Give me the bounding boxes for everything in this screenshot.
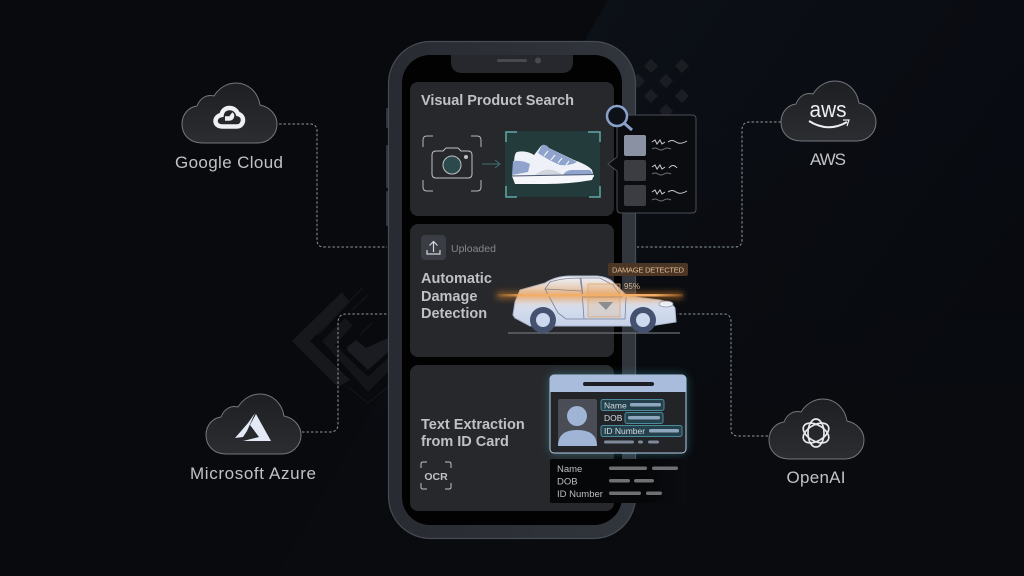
panel: visual product search xyxy=(410,82,614,216)
phone xyxy=(386,42,636,538)
wheels xyxy=(530,307,656,333)
heading: Text Extraction xyxy=(421,417,525,433)
cloud: Google Cloud xyxy=(182,83,277,143)
card footer lines xyxy=(604,440,659,444)
headlight xyxy=(659,301,673,307)
icon: Azure logo xyxy=(235,413,271,441)
icon: shoe xyxy=(512,145,594,184)
extracted text panel xyxy=(550,459,686,503)
panel: automatic damage detection xyxy=(410,224,614,357)
card glow xyxy=(550,375,686,453)
card body xyxy=(550,375,686,453)
icon: AWS logo: aws xyxy=(810,97,846,122)
label: Microsoft Azure: Microsoft Azure xyxy=(190,464,316,483)
icon: Google Cloud logo xyxy=(216,108,243,126)
cloud: OpenAI xyxy=(769,399,864,459)
cloud: AWS xyxy=(781,81,876,141)
car with damage detection xyxy=(497,263,688,333)
label: OpenAI: OpenAI xyxy=(786,468,846,487)
card header xyxy=(550,375,686,392)
damage highlight box xyxy=(588,284,620,317)
phone notch xyxy=(451,55,573,73)
label: AWS: AWS xyxy=(810,150,846,169)
arrow xyxy=(482,160,500,168)
phone screen xyxy=(402,55,622,525)
heading: Detection xyxy=(421,306,487,322)
damage confidence: 95% xyxy=(624,282,640,291)
label: Google Cloud: Google Cloud xyxy=(175,153,283,172)
ID photo xyxy=(558,399,597,446)
ID card xyxy=(550,375,686,453)
camera viewfinder frame xyxy=(423,136,481,191)
icon: OpenAI logo xyxy=(800,419,832,447)
car body xyxy=(513,276,676,326)
shoe scan box xyxy=(505,131,600,197)
ID number field: ID Number xyxy=(604,426,645,436)
phone side buttons xyxy=(386,108,389,226)
shoe scan corners xyxy=(506,132,600,197)
damage label: DAMAGE DETECTED xyxy=(612,266,685,274)
phone body xyxy=(388,42,636,538)
extracted text panel: ID Number xyxy=(557,489,603,500)
heading: Automatic xyxy=(421,271,492,287)
panel: text extraction from ID card xyxy=(410,365,614,511)
OCR label: OCR xyxy=(424,471,448,483)
heading: Damage xyxy=(421,289,477,305)
icon: camera xyxy=(432,148,472,178)
decorative concentric diamonds behind phone xyxy=(292,287,388,403)
result thumbnails xyxy=(624,135,646,206)
DOB field: DOB xyxy=(604,413,623,423)
icon: upload xyxy=(421,235,446,260)
car windows and door lines xyxy=(545,278,626,319)
ground line xyxy=(508,332,680,334)
scan beam xyxy=(497,293,683,298)
connector: Azure to phone xyxy=(302,314,388,432)
OCR frame xyxy=(421,462,451,489)
popup: search results xyxy=(608,115,696,213)
heading: from ID Card xyxy=(421,434,509,450)
connector: Google Cloud to phone xyxy=(279,124,387,247)
car body orange haze xyxy=(510,284,680,300)
uploaded status: Uploaded xyxy=(451,243,496,255)
connector: OpenAI to phone xyxy=(677,314,768,436)
extracted text panel: Name xyxy=(557,464,582,475)
cloud: Microsoft Azure xyxy=(206,394,301,454)
connector: AWS to phone xyxy=(637,122,781,247)
icon: magnifier xyxy=(607,106,632,130)
decorative diamonds behind phone xyxy=(631,59,689,118)
name field: Name xyxy=(604,400,627,410)
extracted text panel: DOB xyxy=(557,476,578,488)
damage label xyxy=(608,263,688,276)
heading: Visual Product Search xyxy=(421,93,574,109)
result scribbles xyxy=(652,140,687,201)
